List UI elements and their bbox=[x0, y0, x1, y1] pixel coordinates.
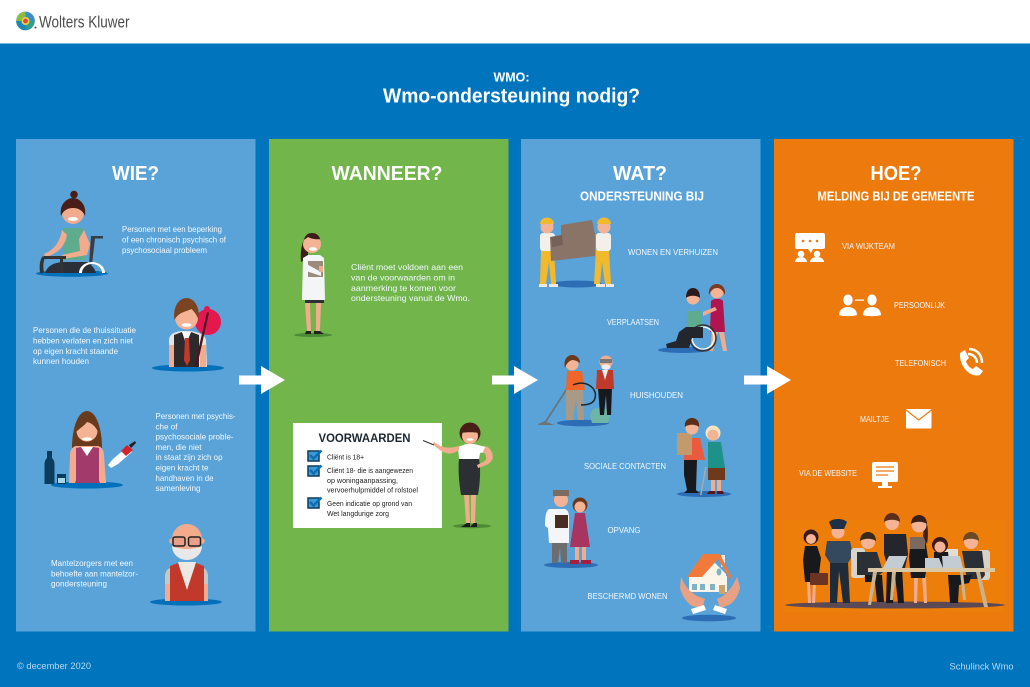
condition list: op woningaanpassing, bbox=[327, 476, 398, 485]
condition list: Geen indicatie op grond van bbox=[327, 499, 412, 508]
illustration: team of professionals bbox=[783, 513, 1005, 612]
logo wordmark: Wolters Kluwer bbox=[39, 14, 130, 32]
subheading: ondersteuning bij: ONDERSTEUNING BIJ bbox=[580, 188, 704, 204]
text: client conditions: Cliënt moet voldoen aan een bbox=[351, 262, 463, 272]
label: mailtje: MAILTJE bbox=[860, 415, 889, 424]
text: persons with a disability: of een chronisch psychisch of bbox=[122, 234, 227, 244]
icon: envelope bbox=[906, 409, 932, 428]
illustration: wheelchair user with helper bbox=[658, 284, 727, 353]
panel: wat bbox=[521, 139, 760, 632]
text: persons with psychosocial problems: in staat zijn zich op bbox=[156, 452, 223, 462]
text: persons with psychosocial problems: Personen met psychis- bbox=[156, 411, 236, 421]
label: wonen en verhuizen: WONEN EN VERHUIZEN bbox=[628, 248, 718, 257]
heading: wie: WIE? bbox=[112, 163, 159, 185]
standing woman bbox=[909, 515, 928, 603]
text: informal carers bbox=[51, 558, 138, 588]
illustration: vacuuming woman and elderly man bbox=[538, 355, 614, 426]
text: client conditions bbox=[351, 262, 470, 303]
icon: monitor bbox=[872, 462, 898, 488]
icon: chat with team bbox=[795, 233, 825, 262]
illustration: woman with bottle and syringe bbox=[44, 411, 136, 488]
heading: wat: WAT? bbox=[613, 163, 667, 185]
label: opvang: OPVANG bbox=[608, 526, 640, 535]
text: persons with a disability: Personen met een beperking bbox=[122, 224, 222, 234]
text: persons with psychosocial problems: men, die niet bbox=[156, 442, 202, 452]
text: persons who left home bbox=[33, 325, 136, 366]
text: persons with a disability: psychosociaal probleem bbox=[122, 245, 207, 255]
text: informal carers: gondersteuning bbox=[51, 578, 107, 588]
label: sociale contacten: SOCIALE CONTACTEN bbox=[584, 462, 666, 471]
text: informal carers: behoefte aan mantelzor- bbox=[51, 568, 138, 578]
text: persons who left home: hebben verlaten en zich niet bbox=[33, 336, 134, 346]
illustration: house in hands bbox=[680, 554, 740, 621]
icon: Wolters Kluwer logo bbox=[16, 12, 36, 30]
police officer bbox=[825, 519, 853, 603]
card heading: VOORWAARDEN bbox=[318, 431, 410, 445]
panel: wie bbox=[16, 139, 256, 632]
label: telefonisch: TELEFONISCH bbox=[895, 359, 946, 368]
label: verplaatsen: VERPLAATSEN bbox=[607, 318, 659, 327]
condition list: Cliënt is 18+ bbox=[327, 452, 365, 462]
footer: date: © december 2020 bbox=[17, 661, 91, 672]
condition list: vervoerhulpmiddel of rolstoel bbox=[327, 486, 418, 494]
icon: two persons bbox=[839, 294, 881, 316]
woman with briefcase bbox=[803, 530, 828, 603]
text: persons with psychosocial problems bbox=[156, 411, 236, 493]
text: persons with psychosocial problems: psychosociale proble- bbox=[156, 432, 234, 442]
illustration: man helping elderly woman bbox=[677, 418, 731, 497]
text: persons who left home: Personen die de thuissituatie bbox=[33, 325, 136, 335]
seated man bbox=[851, 532, 884, 602]
illustration: man with bundle bbox=[152, 298, 224, 372]
text: persons with psychosocial problems: eigen kracht te bbox=[156, 462, 209, 472]
checkbox 2 bbox=[308, 466, 322, 476]
illustration: teacher pointing bbox=[423, 422, 493, 528]
text: informal carers: Mantelzorgers met een bbox=[51, 558, 133, 568]
arrow: wie to wanneer bbox=[239, 366, 285, 394]
card: voorwaarden bbox=[293, 423, 442, 528]
text: persons with a disability bbox=[122, 224, 227, 255]
panel: hoe bbox=[774, 139, 1014, 632]
panel: wanneer bbox=[269, 139, 508, 632]
seated woman bbox=[932, 537, 958, 570]
text: persons with psychosocial problems: samenleving bbox=[156, 483, 201, 493]
text: persons with psychosocial problems: handhaven in de bbox=[156, 473, 214, 483]
footer: source: Schulinck Wmo bbox=[950, 662, 1014, 672]
illustration: movers with couch bbox=[539, 218, 614, 288]
header bar with logo bbox=[0, 0, 1030, 44]
seated man right bbox=[948, 532, 990, 603]
arrow: wat to hoe bbox=[744, 366, 791, 394]
table with laptops bbox=[868, 556, 995, 607]
label: persoonlijk: PERSOONLIJK bbox=[894, 301, 946, 310]
illustration: elderly man bbox=[150, 524, 222, 606]
title block bbox=[383, 70, 640, 108]
heading: hoe: HOE? bbox=[870, 163, 922, 185]
arrow: wanneer to wat bbox=[492, 366, 538, 394]
label: via de website: VIA DE WEBSITE bbox=[799, 469, 857, 478]
text: client conditions: van de voorwaarden om in bbox=[351, 272, 455, 282]
illustration: woman in wheelchair bbox=[36, 191, 108, 277]
title block: Wmo-ondersteuning nodig? bbox=[383, 86, 640, 108]
condition list bbox=[327, 452, 418, 518]
subheading: melding bij de gemeente: MELDING BIJ DE GEMEENTE bbox=[818, 188, 975, 204]
checkbox 3 bbox=[308, 498, 322, 508]
illustration: doctor with girl bbox=[544, 490, 598, 568]
standing man bbox=[884, 513, 908, 603]
condition list: Wet langdurige zorg bbox=[327, 509, 389, 518]
condition list: Cliënt 18- die is aangewezen bbox=[327, 466, 413, 475]
heading: wanneer: WANNEER? bbox=[332, 163, 442, 185]
text: persons who left home: kunnen houden bbox=[33, 356, 89, 366]
illustration: female doctor bbox=[294, 233, 332, 337]
text: persons with psychosocial problems: che of bbox=[156, 421, 178, 431]
text: client conditions: aanmerking te komen voor bbox=[351, 283, 456, 293]
text: client conditions: ondersteuning vanuit de Wmo. bbox=[351, 293, 470, 303]
title block: WMO: bbox=[494, 70, 530, 84]
text: persons who left home: op eigen kracht staande bbox=[33, 346, 118, 356]
label: beschermd wonen: BESCHERMD WONEN bbox=[588, 592, 668, 601]
icon: phone bbox=[960, 349, 983, 375]
label: via wijkteam: VIA WIJKTEAM bbox=[842, 242, 895, 251]
label: huishouden: HUISHOUDEN bbox=[630, 391, 683, 400]
checkbox 1 bbox=[308, 450, 322, 461]
